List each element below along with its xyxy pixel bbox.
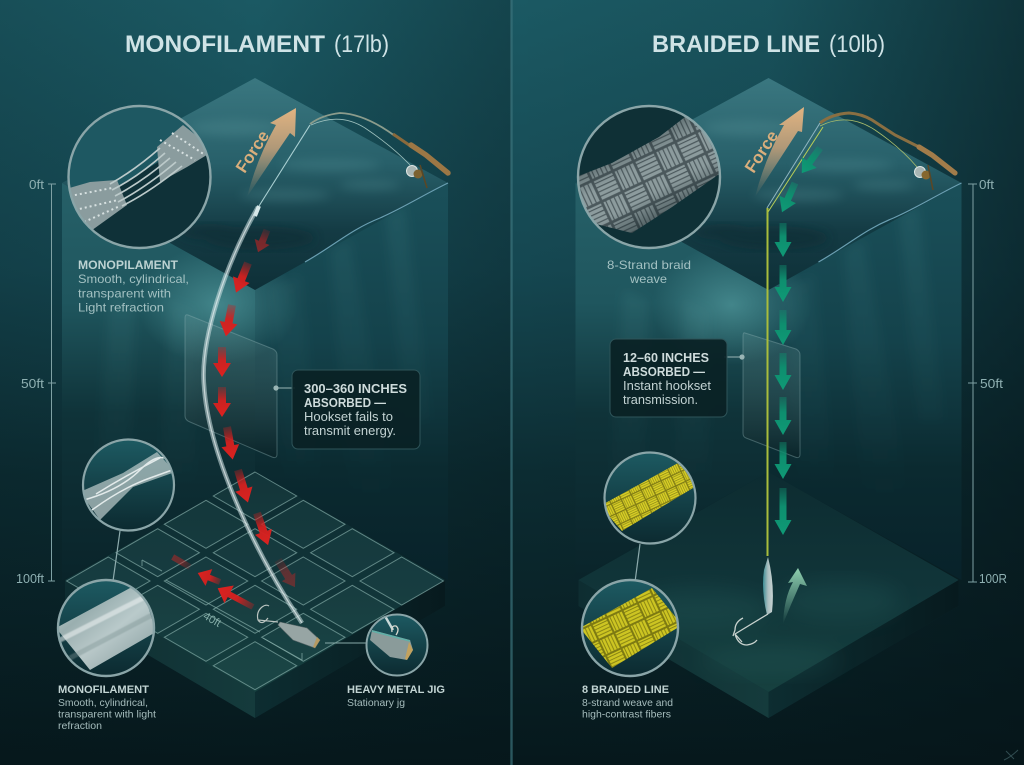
- seabed texture: [630, 580, 900, 674]
- magnifier connector: [113, 531, 120, 581]
- glass panel: [185, 315, 277, 458]
- force arrow: [755, 107, 804, 197]
- label: monofilament bottom: transparent with light: [58, 708, 156, 720]
- panel: braided line: [576, 31, 1007, 720]
- depth scale: 50ft: [21, 376, 44, 391]
- label: braided line bottom: 8-strand weave and: [582, 697, 673, 709]
- magnifier connector: [635, 544, 640, 582]
- water column and seabed: [576, 78, 962, 718]
- metal jig and hook: [733, 557, 773, 645]
- magnifier: smooth monofilament: [56, 580, 156, 676]
- magnifier: frayed monofilament: [60, 105, 215, 249]
- label: braided line bottom: 8 BRAIDED LINE: [582, 684, 669, 696]
- callout: absorbed inches: ABSORBED —: [623, 365, 705, 379]
- label: monofilament detail: transparent with: [78, 286, 171, 300]
- force arrow: [247, 108, 296, 197]
- label: monofilament bottom: [58, 684, 156, 732]
- label: monofilament detail: Smooth, cylindrical,: [78, 272, 189, 286]
- force label: Force: [232, 127, 273, 176]
- label: monofilament detail: MONOPILAMENT: [78, 258, 179, 272]
- magnifier: yellow braid small: [600, 452, 698, 544]
- heading: monofilament: MONOFILAMENT: [125, 31, 325, 58]
- label: braid weave: 8-Strand braid: [607, 258, 691, 272]
- callout: absorbed inches: ABSORBED —: [304, 396, 386, 410]
- red force arrows: [171, 227, 302, 616]
- label: monofilament bottom: Smooth, cylindrical,: [58, 697, 148, 709]
- heading: braided line: (10lb): [829, 31, 885, 58]
- heavy metal jig: [258, 605, 320, 648]
- magnifier: grey braid: [576, 105, 725, 249]
- label: monofilament bottom: refraction: [58, 720, 102, 732]
- label: heavy metal jig: HEAVY METAL JIG: [347, 684, 445, 696]
- fishing rod: [310, 113, 448, 188]
- magnifier: jig: [366, 614, 428, 676]
- seabed distance label: 40ft: [201, 610, 223, 630]
- heading: braided line: BRAIDED LINE: [652, 31, 820, 58]
- callout: absorbed inches: [273, 370, 420, 449]
- label: braided line bottom: high-contrast fibers: [582, 708, 671, 720]
- callout: absorbed inches: 300–360 INCHES: [304, 382, 407, 396]
- magnifier: yellow braid large: [580, 580, 682, 676]
- upward arrow: [783, 568, 807, 624]
- panel divider: [510, 0, 513, 765]
- monofilament line: [204, 125, 310, 623]
- callout: absorbed inches: transmit energy.: [304, 424, 396, 438]
- callout: absorbed inches: 12–60 INCHES: [623, 351, 709, 365]
- magnifier: twisted monofilament: [80, 439, 175, 531]
- fishing rod: [820, 113, 955, 190]
- seabed ruler marks: [142, 560, 302, 660]
- panel: monofilament: [16, 31, 448, 732]
- depth scale: 0ft: [29, 177, 44, 192]
- left panel shading: [0, 0, 511, 765]
- braided line: [767, 123, 823, 556]
- label: braid weave: [607, 258, 691, 286]
- depth scale: 50ft: [980, 376, 1003, 391]
- seabed grid: [67, 472, 443, 690]
- label: monofilament detail: [78, 258, 189, 314]
- right panel shading: [513, 0, 1024, 765]
- jig connector: [325, 642, 367, 644]
- glass panel: [743, 333, 800, 458]
- depth scale: [16, 177, 56, 586]
- label: braided line bottom: [582, 684, 673, 720]
- depth scale: [968, 177, 1007, 586]
- label: monofilament detail: Light refraction: [78, 300, 164, 314]
- watermark icon: [1004, 750, 1018, 760]
- callout: absorbed inches: Hookset fails to: [304, 410, 393, 424]
- label: braid weave: weave: [629, 272, 667, 286]
- water column and seabed: [62, 78, 448, 718]
- force label: Force: [741, 127, 782, 176]
- heading: monofilament: (17lb): [334, 31, 389, 58]
- depth scale: 100R: [979, 571, 1007, 586]
- callout: absorbed inches: transmission.: [623, 393, 698, 407]
- callout: absorbed inches: [610, 339, 745, 417]
- label: heavy metal jig: [347, 684, 445, 709]
- label: monofilament bottom: MONOFILAMENT: [58, 684, 149, 696]
- green force arrows: [774, 143, 827, 535]
- label: heavy metal jig: Stationary jg: [347, 697, 405, 709]
- callout: absorbed inches: Instant hookset: [623, 379, 712, 393]
- depth scale: 100ft: [16, 571, 44, 586]
- depth scale: 0ft: [979, 177, 994, 192]
